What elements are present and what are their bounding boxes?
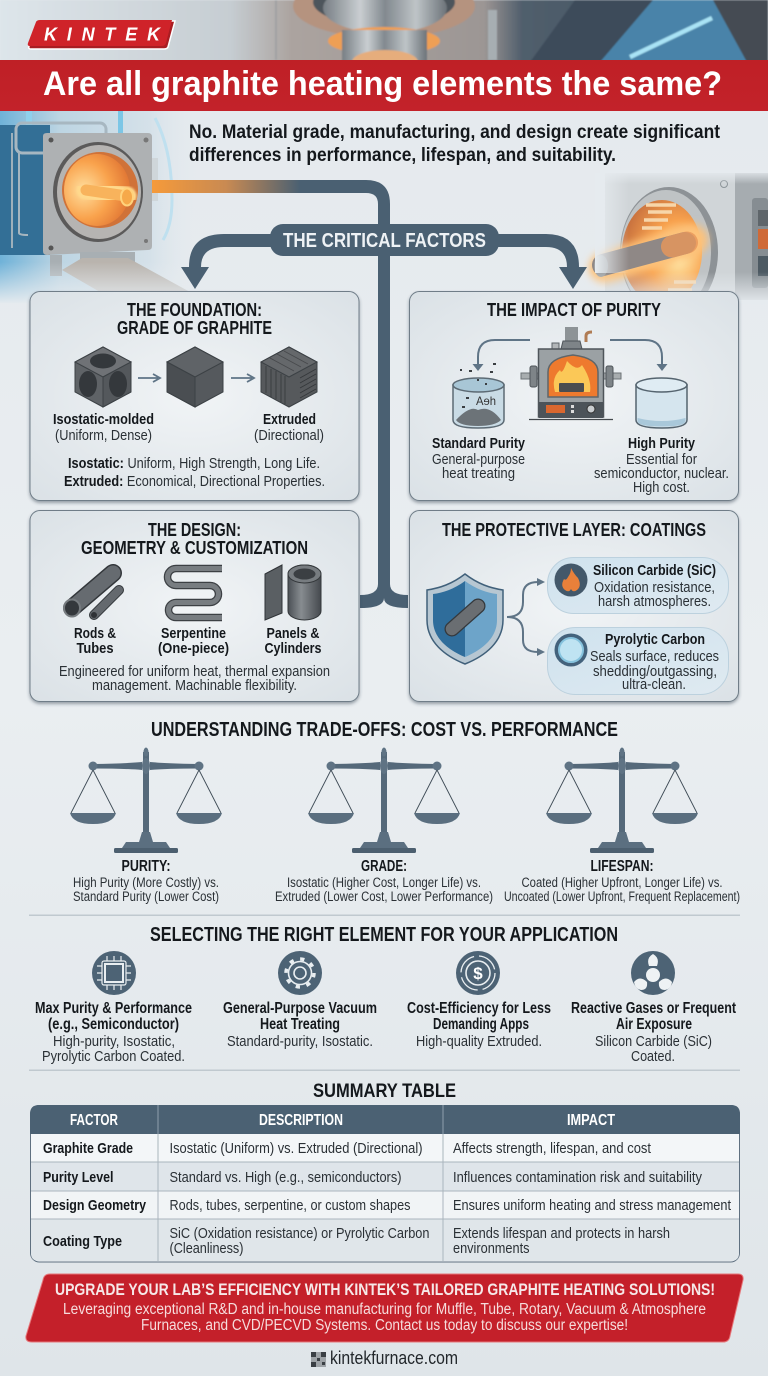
icon: extruded cube xyxy=(261,347,317,407)
icon: rods and tubes xyxy=(64,573,119,618)
label: rods and tubes: Tubes xyxy=(76,640,114,657)
row: purity level: Purity Level xyxy=(43,1169,114,1186)
arrow: cube two to three xyxy=(231,374,254,382)
label: standard purity: Standard Purity xyxy=(432,435,526,452)
application: general purpose: Standard-purity, Isostatic. xyxy=(227,1033,373,1050)
text: grade comparison: Extruded: Economical, Directional Properties. xyxy=(64,474,325,490)
trade-off: purity xyxy=(70,748,222,904)
icon: balance scale xyxy=(546,748,698,853)
application: reactive gases: Silicon Carbide (SiC) xyxy=(595,1033,712,1050)
application: max purity: Pyrolytic Carbon Coated. xyxy=(42,1048,185,1065)
row: coating type: SiC (Oxidation resistance) or Pyrolytic Carbon xyxy=(170,1225,430,1242)
label: panels and cylinders: Panels & xyxy=(266,625,320,642)
heading: coatings: THE PROTECTIVE LAYER: COATINGS xyxy=(442,520,706,540)
callout: pyrolytic carbon xyxy=(548,628,728,694)
logo xyxy=(28,20,175,49)
call to action banner: Leveraging exceptional R&D and in-house manufacturing for Muffle, Tube, Rotary, Vacuum & Atmosphere xyxy=(63,1301,706,1318)
text: grade comparison: Isostatic: Uniform, High Strength, Long Life. xyxy=(68,456,320,472)
trade-off: grade: Extruded (Lower Cost, Lower Performance) xyxy=(275,889,493,904)
icon: dollar: $ xyxy=(473,964,483,983)
heading: design: THE DESIGN: xyxy=(148,520,241,540)
heading: design xyxy=(81,520,308,558)
label: standard purity: heat treating xyxy=(442,466,515,482)
title banner xyxy=(0,60,768,111)
row: purity level xyxy=(43,1169,702,1186)
callout: silicon carbide: harsh atmospheres. xyxy=(598,594,711,610)
application: cost efficiency: Demanding Apps xyxy=(433,1016,529,1033)
arrow: cube one to two xyxy=(138,374,160,382)
callout: silicon carbide: Oxidation resistance, xyxy=(594,580,715,596)
icon: panels and cylinders xyxy=(265,565,321,620)
icon: isostatic cube xyxy=(75,347,131,407)
title banner: Are all graphite heating elements the same? xyxy=(43,65,722,103)
heading: design: GEOMETRY & CUSTOMIZATION xyxy=(81,538,308,558)
icon: ash beaker xyxy=(453,364,504,428)
table body xyxy=(30,1106,740,1262)
text: design summary: Engineered for uniform heat, thermal expansion xyxy=(59,664,330,680)
label: serpentine: (One-piece) xyxy=(158,640,229,657)
row: coating type xyxy=(43,1225,670,1257)
callout: silicon carbide: Silicon Carbide (SiC) xyxy=(593,562,716,579)
application: general purpose: General-Purpose Vacuum xyxy=(223,1000,377,1017)
icon: ash beaker: Aɘh xyxy=(476,394,496,408)
connector: shield to coatings xyxy=(507,578,545,656)
label: extruded: Extruded xyxy=(263,411,316,428)
header machinery image xyxy=(0,0,768,74)
application: cost efficiency xyxy=(407,951,551,1050)
application: reactive gases xyxy=(571,951,736,1065)
icon: gear xyxy=(278,951,322,995)
subtitle: No. Material grade, manufacturing, and design create significant xyxy=(189,121,720,143)
label: extruded xyxy=(254,411,324,444)
panel: purity xyxy=(410,292,738,500)
table rows xyxy=(31,1134,739,1261)
icon: dollar xyxy=(456,951,500,995)
table header xyxy=(30,1105,740,1134)
row: design geometry: Rods, tubes, serpentine, or custom shapes xyxy=(170,1197,410,1214)
row: coating type: environments xyxy=(453,1240,530,1257)
application: max purity xyxy=(35,951,192,1065)
row: design geometry xyxy=(43,1197,732,1214)
application: max purity: Max Purity & Performance xyxy=(35,1000,192,1017)
callout: pyrolytic carbon: Pyrolytic Carbon xyxy=(605,631,705,648)
label: panels and cylinders: Cylinders xyxy=(264,640,322,657)
icon: shield xyxy=(427,574,503,664)
label: standard purity: General-purpose xyxy=(432,452,525,468)
application: general purpose: Heat Treating xyxy=(260,1016,340,1033)
row: coating type: (Cleanliness) xyxy=(170,1240,244,1257)
left furnace illustration xyxy=(0,111,200,303)
arrow: furnace to high purity xyxy=(610,340,668,371)
callout: pyrolytic carbon: shedding/outgassing, xyxy=(593,664,717,680)
label: high purity xyxy=(594,435,729,496)
application: general purpose xyxy=(223,951,377,1050)
call to action banner: Furnaces, and CVD/PECVD Systems. Contact us today to discuss our expertise! xyxy=(141,1317,628,1334)
panel: coatings xyxy=(410,510,738,702)
table header: FACTOR xyxy=(70,1112,118,1129)
row: graphite grade: Isostatic (Uniform) vs. Extruded (Directional) xyxy=(170,1140,422,1157)
trade-off: grade: Isostatic (Higher Cost, Longer Life) vs. xyxy=(287,875,481,890)
logo: KINTEK xyxy=(44,24,162,44)
label: isostatic-molded xyxy=(53,411,154,444)
call to action banner xyxy=(26,1274,743,1342)
arrow: furnace to standard purity xyxy=(472,340,530,371)
label: high purity: Essential for xyxy=(626,452,697,468)
row: graphite grade: Graphite Grade xyxy=(43,1140,133,1157)
label: serpentine: Serpentine xyxy=(161,625,226,642)
icon: carbon sphere xyxy=(554,634,588,666)
row: purity level: Influences contamination risk and suitability xyxy=(453,1169,702,1186)
arrow: right branch xyxy=(495,234,587,289)
label: panels and cylinders xyxy=(264,625,322,657)
subtitle xyxy=(189,121,720,166)
heading: purity: THE IMPACT OF PURITY xyxy=(487,300,661,320)
panel: design xyxy=(30,510,359,702)
header fade xyxy=(0,262,768,304)
label: high purity: semiconductor, nuclear. xyxy=(594,466,729,482)
label: extruded: (Directional) xyxy=(254,428,324,444)
label: isostatic-molded: (Uniform, Dense) xyxy=(55,428,152,444)
icon: reactive gas xyxy=(631,951,675,995)
text: design summary xyxy=(59,664,330,694)
label: serpentine xyxy=(158,625,229,657)
icon: QR code xyxy=(311,1352,326,1367)
heading: summary table: SUMMARY TABLE xyxy=(313,1080,456,1102)
row: coating type: Extends lifespan and protects in harsh xyxy=(453,1225,670,1242)
application: max purity: High-purity, Isostatic, xyxy=(53,1033,175,1050)
heading: foundation: THE FOUNDATION: xyxy=(127,300,262,320)
summary table xyxy=(30,1105,740,1262)
heading: selecting: SELECTING THE RIGHT ELEMENT FOR YOUR APPLICATION xyxy=(150,923,618,946)
subtitle: differences in performance, lifespan, and suitability. xyxy=(189,144,616,166)
icon: flame xyxy=(554,564,588,596)
trade-off: grade: GRADE: xyxy=(361,858,407,875)
icon: balance scale xyxy=(70,748,222,853)
panel: foundation xyxy=(30,292,359,500)
heading: trade-offs: UNDERSTANDING TRADE-OFFS: COST VS. PERFORMANCE xyxy=(151,718,618,741)
label: high purity: High cost. xyxy=(633,480,690,496)
icon: balance scale xyxy=(308,748,460,853)
icon: serpentine xyxy=(168,568,222,618)
row: coating type: Coating Type xyxy=(43,1233,122,1250)
row: graphite grade: Affects strength, lifespan, and cost xyxy=(453,1140,652,1157)
text: design summary: management. Machinable flexibility. xyxy=(92,678,297,694)
flow connector: heat pipe xyxy=(152,180,408,608)
badge: the critical factors xyxy=(270,224,499,256)
trade-off: lifespan: Coated (Higher Upfront, Longer Life) vs. xyxy=(522,875,722,890)
callout: silicon carbide xyxy=(548,558,728,614)
callout: pyrolytic carbon: ultra-clean. xyxy=(622,677,686,693)
right furnace illustration xyxy=(594,170,768,317)
trade-off: purity: Standard Purity (Lower Cost) xyxy=(73,889,219,904)
trade-off: lifespan xyxy=(504,748,740,904)
application: cost efficiency: High-quality Extruded. xyxy=(416,1033,542,1050)
table header: DESCRIPTION xyxy=(259,1112,343,1129)
row: purity level: Standard vs. High (e.g., semiconductors) xyxy=(170,1169,402,1186)
heading: foundation xyxy=(117,300,272,338)
callout: pyrolytic carbon: Seals surface, reduces xyxy=(590,649,719,665)
application: reactive gases: Coated. xyxy=(631,1048,675,1065)
icon: clean beaker xyxy=(636,378,687,428)
trade-off: purity: PURITY: xyxy=(122,858,170,875)
row: design geometry: Design Geometry xyxy=(43,1197,147,1214)
label: rods and tubes: Rods & xyxy=(74,625,116,642)
application: max purity: (e.g., Semiconductor) xyxy=(48,1016,179,1033)
application: cost efficiency: Cost-Efficiency for Less xyxy=(407,1000,551,1017)
trade-off: lifespan: LIFESPAN: xyxy=(590,858,654,875)
trade-off: grade xyxy=(275,748,493,904)
text: grade comparison xyxy=(64,456,325,490)
table header: IMPACT xyxy=(567,1112,615,1129)
trade-off: purity: High Purity (More Costly) vs. xyxy=(73,875,219,890)
application: reactive gases: Air Exposure xyxy=(616,1016,692,1033)
footer: website: kintekfurnace.com xyxy=(330,1348,458,1368)
label: isostatic-molded: Isostatic-molded xyxy=(53,411,154,428)
arrow: left branch xyxy=(181,234,275,289)
label: rods and tubes xyxy=(74,625,116,657)
badge: the critical factors: THE CRITICAL FACTORS xyxy=(283,229,486,252)
icon: plain cube xyxy=(167,347,223,407)
icon: furnace xyxy=(521,327,621,420)
heading: foundation: GRADE OF GRAPHITE xyxy=(117,318,272,338)
row: graphite grade xyxy=(43,1140,652,1157)
label: high purity: High Purity xyxy=(628,435,696,452)
label: standard purity xyxy=(432,435,526,482)
icon: chip xyxy=(92,951,136,995)
